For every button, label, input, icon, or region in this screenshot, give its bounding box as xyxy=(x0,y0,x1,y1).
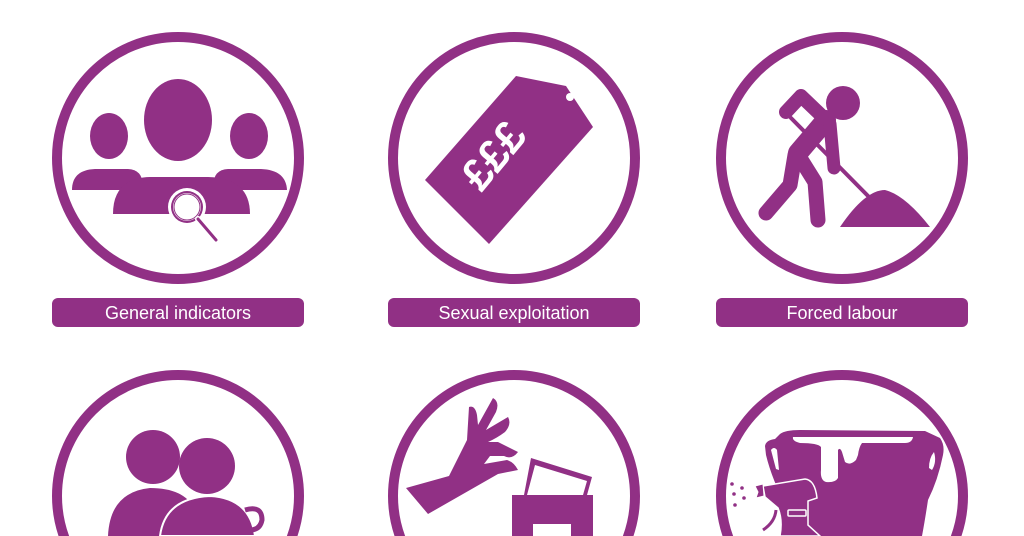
label: Forced labour: Forced labour xyxy=(786,303,898,323)
panel: general indicators xyxy=(52,37,304,327)
circle frame: general xyxy=(57,37,299,279)
circle frame: sexual xyxy=(393,37,635,279)
circle frame: row2 middle xyxy=(393,375,635,536)
icon: price tag with pounds: £££ xyxy=(452,111,537,200)
icon: people with magnifier xyxy=(72,79,287,240)
label: Sexual exploitation: Sexual exploitation xyxy=(438,303,590,323)
panel: domestic servitude (row 2) xyxy=(721,375,963,536)
icon: price tag with pounds xyxy=(425,76,593,244)
circle frame: forced xyxy=(721,37,963,279)
panel: domestic / family (row 2) xyxy=(57,375,299,536)
label: General indicators xyxy=(52,298,304,327)
circle frame: row2 left xyxy=(57,375,299,536)
label: Sexual exploitation xyxy=(388,298,640,327)
icon: bucket and spray bottle xyxy=(730,430,944,536)
icon: hand and box xyxy=(406,398,593,536)
icon: two figures xyxy=(108,430,262,536)
label: Forced labour xyxy=(716,298,968,327)
icon: worker digging xyxy=(766,86,930,227)
panel: criminal exploitation (row 2) xyxy=(393,375,635,536)
label: General indicators: General indicators xyxy=(105,303,251,323)
panel: forced labour xyxy=(716,37,968,327)
panel: sexual exploitation xyxy=(388,37,640,327)
circle frame: row2 right xyxy=(721,375,963,536)
